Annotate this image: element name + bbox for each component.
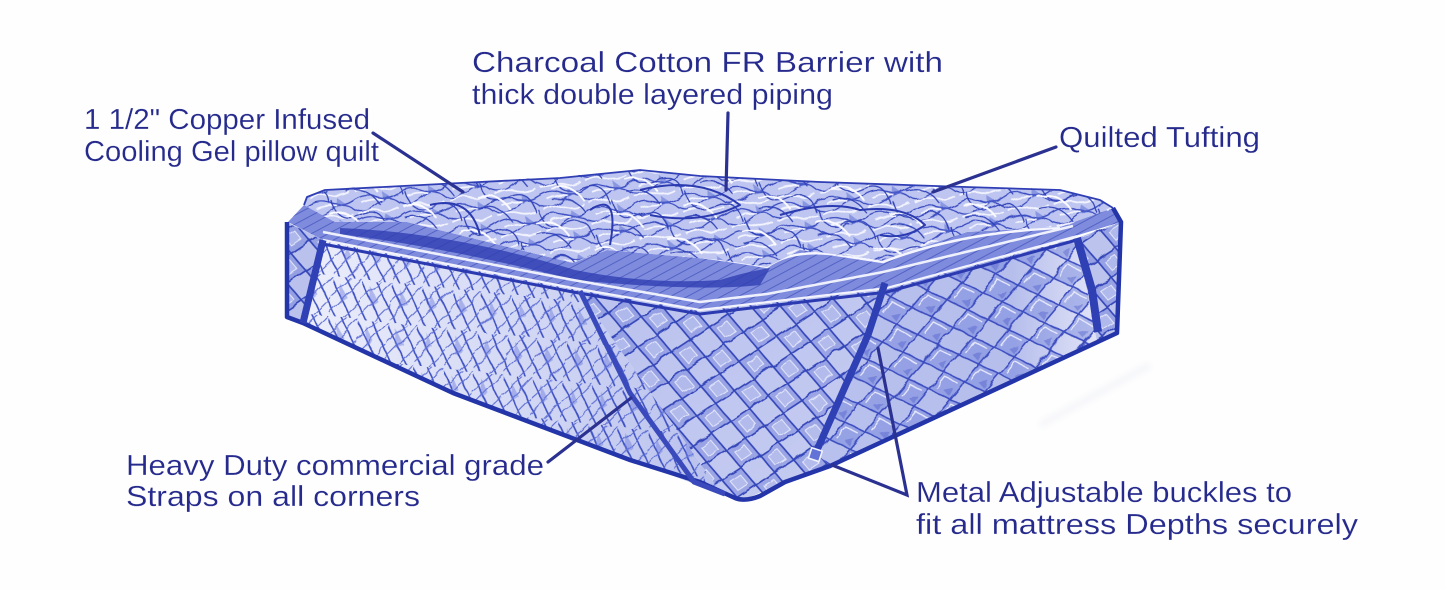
callout: copper infused cooling gel: 1 1/2" Copper Infused [84,104,370,136]
mattress topper illustration [287,170,1121,500]
left corner panel [287,222,323,323]
callout: charcoal cotton FR barrier [472,47,943,190]
callout: heavy duty straps: Heavy Duty commercial grade [126,450,544,482]
callout: metal adjustable buckles: fit all mattress Depths securely [916,509,1359,541]
callout: charcoal cotton FR barrier: Charcoal Cotton FR Barrier with [472,47,943,79]
corner strap left [303,240,323,323]
callout: copper infused cooling gel: Cooling Gel pillow quilt [84,136,379,168]
callout: charcoal cotton FR barrier: thick double layered piping [472,79,833,111]
callout: heavy duty straps: Straps on all corners [126,481,420,513]
left side panel with diamond quilting [303,240,722,494]
corner strap front right [817,283,885,450]
right corner panel [1077,222,1121,342]
callout: quilted tufting [933,122,1260,192]
gusset band and piping [288,205,1121,314]
callout: metal adjustable buckles [832,348,1359,541]
metal buckle [808,448,822,462]
corner strap right [1077,238,1098,332]
quilted top surface [304,170,1113,267]
front corner panel with diamond quilting [578,288,887,500]
corner strap front left [580,291,725,494]
callout: heavy duty straps [126,398,631,513]
callout: metal adjustable buckles: Metal Adjustable buckles to [916,477,1292,509]
bottom edge piping [287,208,1121,500]
callout: copper infused cooling gel [84,104,463,192]
right side panel with diamond quilting [815,238,1097,466]
callout: quilted tufting: Quilted Tufting [1059,122,1260,154]
faint smudges on paper [1040,365,1150,425]
